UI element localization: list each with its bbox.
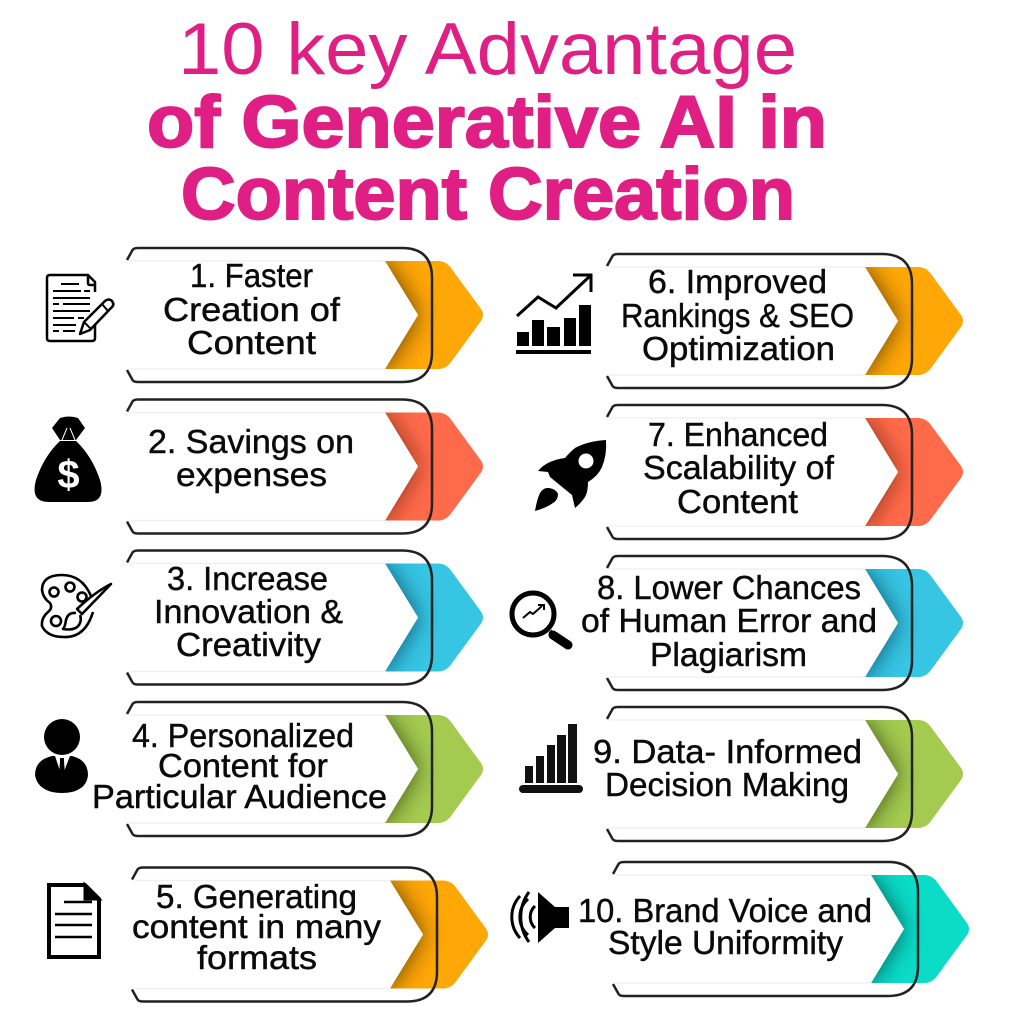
- label 7: [643, 416, 835, 520]
- card 10: Brand Voice and Style Uniformity: [512, 862, 969, 996]
- label 5: content in many: [132, 908, 382, 945]
- icon: document with pencil: [47, 275, 113, 341]
- label 3: 3. Increase: [167, 560, 328, 597]
- card 9: Data-Informed Decision Making: [519, 707, 963, 841]
- label 6: 6. Improved: [648, 263, 827, 300]
- label 5: [132, 878, 382, 976]
- label 9: [593, 733, 862, 803]
- title: of Generative AI in: [147, 82, 827, 163]
- icon: speaker: [512, 892, 569, 943]
- label 5: formats: [197, 939, 317, 976]
- label 3: Creativity: [176, 626, 322, 663]
- label 1: 1. Faster: [190, 257, 313, 294]
- label 10: [578, 892, 872, 961]
- label 6: Optimization: [642, 330, 835, 367]
- label 10: 10. Brand Voice and: [578, 892, 872, 929]
- card 2: Savings on expenses: [35, 400, 483, 534]
- label 7: Content: [677, 483, 798, 520]
- icon: money bag: $: [57, 453, 80, 497]
- label 4: Content for: [158, 747, 328, 784]
- label 1: Content: [187, 324, 316, 361]
- label 6: Rankings & SEO: [621, 297, 854, 334]
- card 1: Faster Creation of Content: [47, 248, 483, 382]
- label 8: Plagiarism: [650, 636, 807, 673]
- title: 10 key Advantage: [178, 9, 797, 90]
- icon: text document: [49, 885, 99, 957]
- label 4: [92, 717, 387, 815]
- icon: paint palette: [42, 575, 111, 637]
- label 9: Decision Making: [605, 766, 849, 803]
- title: Content Creation: [181, 154, 795, 235]
- label 8: of Human Error and: [581, 602, 877, 639]
- label 2: [148, 423, 354, 493]
- label 10: Style Uniformity: [608, 924, 843, 961]
- icon: money bag: [35, 416, 102, 502]
- label 2: expenses: [176, 456, 327, 493]
- label 9: 9. Data- Informed: [593, 733, 862, 770]
- label 2: 2. Savings on: [148, 423, 354, 460]
- title: [147, 9, 827, 235]
- card 5: Generating content in many formats: [49, 868, 488, 1002]
- label 3: [154, 560, 343, 663]
- label 1: Creation of: [163, 291, 341, 328]
- label 1: [163, 257, 341, 361]
- label 7: 7. Enhanced: [648, 416, 828, 453]
- icon: growth bar chart: [516, 275, 591, 354]
- card 8: Lower Chances of Human Error and Plagiarism: [512, 556, 963, 690]
- card 4: Personalized Content for Particular Audience: [35, 702, 483, 836]
- icon: ascending bars: [519, 724, 583, 793]
- card 6: Improved Rankings and SEO Optimization: [516, 254, 963, 388]
- label 4: 4. Personalized: [132, 717, 354, 754]
- label 7: Scalability of: [643, 449, 835, 486]
- label 8: [581, 569, 877, 673]
- icon: business person: [35, 719, 88, 793]
- label 4: Particular Audience: [92, 778, 387, 815]
- label 3: Innovation &: [154, 593, 343, 630]
- card 7: Enhanced Scalability of Content: [535, 405, 963, 539]
- label 6: [621, 263, 854, 367]
- label 8: 8. Lower Chances: [597, 569, 861, 606]
- icon: rocket: [535, 440, 606, 511]
- icon: magnifier with trend line: [512, 593, 568, 645]
- card 3: Increase Innovation and Creativity: [42, 550, 483, 684]
- label 5: 5. Generating: [156, 878, 357, 915]
